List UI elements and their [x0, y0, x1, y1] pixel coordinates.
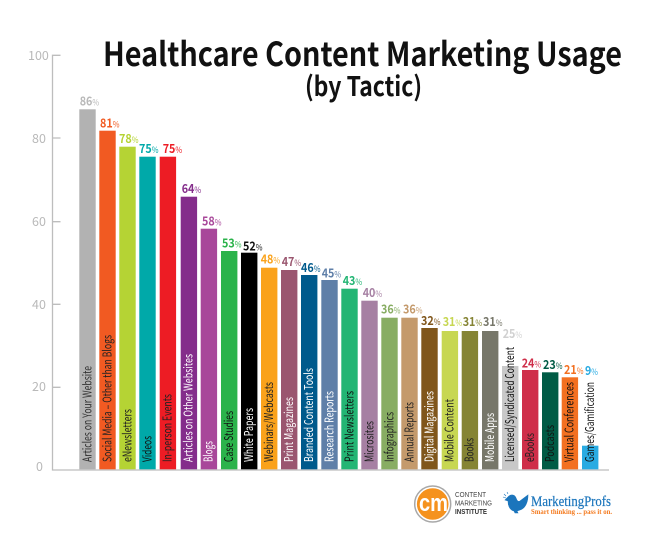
bar: Mobile Content: Mobile Content: [441, 399, 458, 462]
bar: Articles on Other Websites: Articles on Other Websites: [180, 354, 197, 462]
bar: Podcasts: 23%: [543, 354, 563, 373]
bar: In-person Events: [159, 138, 182, 469]
logo: MarketingProfs: MarketingProfs: [531, 494, 611, 510]
y axis: 60: [32, 211, 46, 230]
bar: Books: 31%: [463, 311, 482, 330]
logo: MarketingProfs: [503, 492, 612, 516]
bar: White Papers: [240, 236, 263, 469]
bar: Mobile Apps: 31%: [483, 311, 503, 330]
bar: Webinars/Webcasts: Webinars/Webcasts: [260, 382, 277, 462]
logo: MarketingProfs: Smart thinking ... pass it on.: [531, 507, 612, 516]
bar: Podcasts: [541, 354, 563, 469]
bar: In-person Events: In-person Events: [159, 394, 176, 462]
bar: Microsites: [360, 282, 382, 469]
bar: Case Studies: 53%: [222, 232, 242, 252]
bar: Videos: Videos: [138, 436, 155, 462]
bar chart: [78, 91, 598, 469]
bar: Annual Reports: 36%: [403, 298, 423, 318]
bar: Licensed/Syndicated Content: 25%: [503, 323, 522, 342]
bar: Digital Magazines: 32%: [421, 310, 441, 329]
bar: eBooks: [521, 352, 541, 469]
icon: blue bird: [503, 492, 528, 513]
title: (by Tactic): [305, 65, 422, 104]
bar: Mobile Content: [441, 311, 462, 469]
bar: Print Newsletters: [340, 270, 362, 469]
bar: Articles on Other Websites: 64%: [182, 178, 201, 197]
bar: eNewsletters: [118, 128, 139, 469]
bar: Research Reports: 45%: [322, 263, 341, 282]
bar: Podcasts: Podcasts: [541, 425, 558, 462]
bar: Branded Content Tools: 46%: [301, 257, 321, 276]
bar: Print Magazines: [280, 251, 301, 469]
bar: eBooks: 24%: [522, 352, 541, 372]
logo: Content Marketing Institute: MARKETING: [455, 498, 492, 508]
bar: White Papers: White Papers: [240, 408, 257, 462]
bar: Research Reports: [320, 263, 341, 469]
bar: Games/Gamification: Games/Gamification: [581, 382, 598, 462]
bar: Case Studies: [220, 232, 242, 469]
bar: Branded Content Tools: [300, 257, 321, 469]
bar: Virtual Conferences: [561, 359, 584, 469]
bar: Virtual Conferences: Virtual Conferences: [561, 382, 578, 462]
bar: Webinars/Webcasts: [260, 248, 280, 469]
y axis: 40: [32, 294, 46, 313]
bar: Blogs: 58%: [202, 211, 222, 230]
bar: Books: [461, 311, 482, 469]
bar: Articles on Other Websites: [180, 178, 201, 469]
bar: Research Reports: Research Reports: [320, 391, 337, 462]
bar: Licensed/Syndicated Content: Licensed/Syndicated Content: [501, 347, 518, 462]
bar: Virtual Conferences: 21%: [564, 359, 584, 378]
y axis: [28, 45, 609, 475]
bar: Infographics: 36%: [381, 298, 401, 318]
bar: Annual Reports: Annual Reports: [400, 402, 417, 462]
bar: Articles on Your Website: Articles on Your Website: [78, 366, 95, 462]
bar: Mobile Apps: [481, 311, 503, 469]
bar: Books: Books: [461, 438, 478, 462]
bar: Blogs: [200, 211, 222, 469]
bar: Print Newsletters: Print Newsletters: [340, 391, 357, 462]
bar: Microsites: 40%: [363, 282, 382, 301]
bar: Social Media: Social Media – Other than Blogs: [98, 335, 115, 462]
bar: eBooks: eBooks: [521, 433, 538, 462]
bar: Videos: 75%: [139, 138, 159, 157]
y axis: 0: [36, 456, 43, 475]
y axis: 100: [28, 45, 49, 64]
title: [103, 28, 622, 104]
bar: Blogs: Blogs: [200, 441, 217, 462]
bar: Microsites: Microsites: [360, 421, 377, 462]
y axis: 80: [32, 128, 46, 147]
bar: Infographics: [380, 298, 401, 469]
bar: Social Media: 81%: [100, 113, 120, 132]
bar: Articles on Your Website: 86%: [80, 91, 99, 110]
bar: In-person Events: 75%: [163, 138, 182, 157]
y axis: 20: [32, 376, 46, 395]
bar: Annual Reports: [400, 298, 423, 469]
bar: Games/Gamification: 9%: [585, 360, 598, 379]
logo: Content Marketing Institute: cm: [419, 490, 448, 517]
bar: Social Media: [98, 113, 120, 469]
bar: Licensed/Syndicated Content: [501, 323, 522, 469]
bar: Digital Magazines: [420, 310, 441, 469]
bar: Print Magazines: Print Magazines: [280, 397, 297, 462]
bar: Infographics: Infographics: [380, 412, 397, 462]
bar: Branded Content Tools: Branded Content Tools: [300, 368, 317, 462]
logo: Content Marketing Institute: CONTENT: [455, 490, 486, 499]
bar: Digital Magazines: Digital Magazines: [420, 391, 437, 462]
bar: Print Newsletters: 43%: [343, 270, 362, 289]
logo: Content Marketing Institute: [415, 486, 492, 522]
bar: eNewsletters: 78%: [119, 128, 139, 147]
bar: Articles on Your Website: [78, 91, 99, 469]
bar: Case Studies: Case Studies: [220, 411, 237, 462]
bar: Mobile Content: 31%: [443, 311, 462, 330]
bar: White Papers: 52%: [243, 236, 263, 255]
bar: Mobile Apps: Mobile Apps: [481, 413, 498, 462]
logo: Content Marketing Institute: INSTITUTE: [455, 507, 487, 516]
bar: Print Magazines: 47%: [282, 251, 301, 270]
bar: eNewsletters: eNewsletters: [118, 409, 135, 462]
bar: Webinars/Webcasts: 48%: [261, 248, 280, 268]
bar: Videos: [138, 138, 159, 469]
